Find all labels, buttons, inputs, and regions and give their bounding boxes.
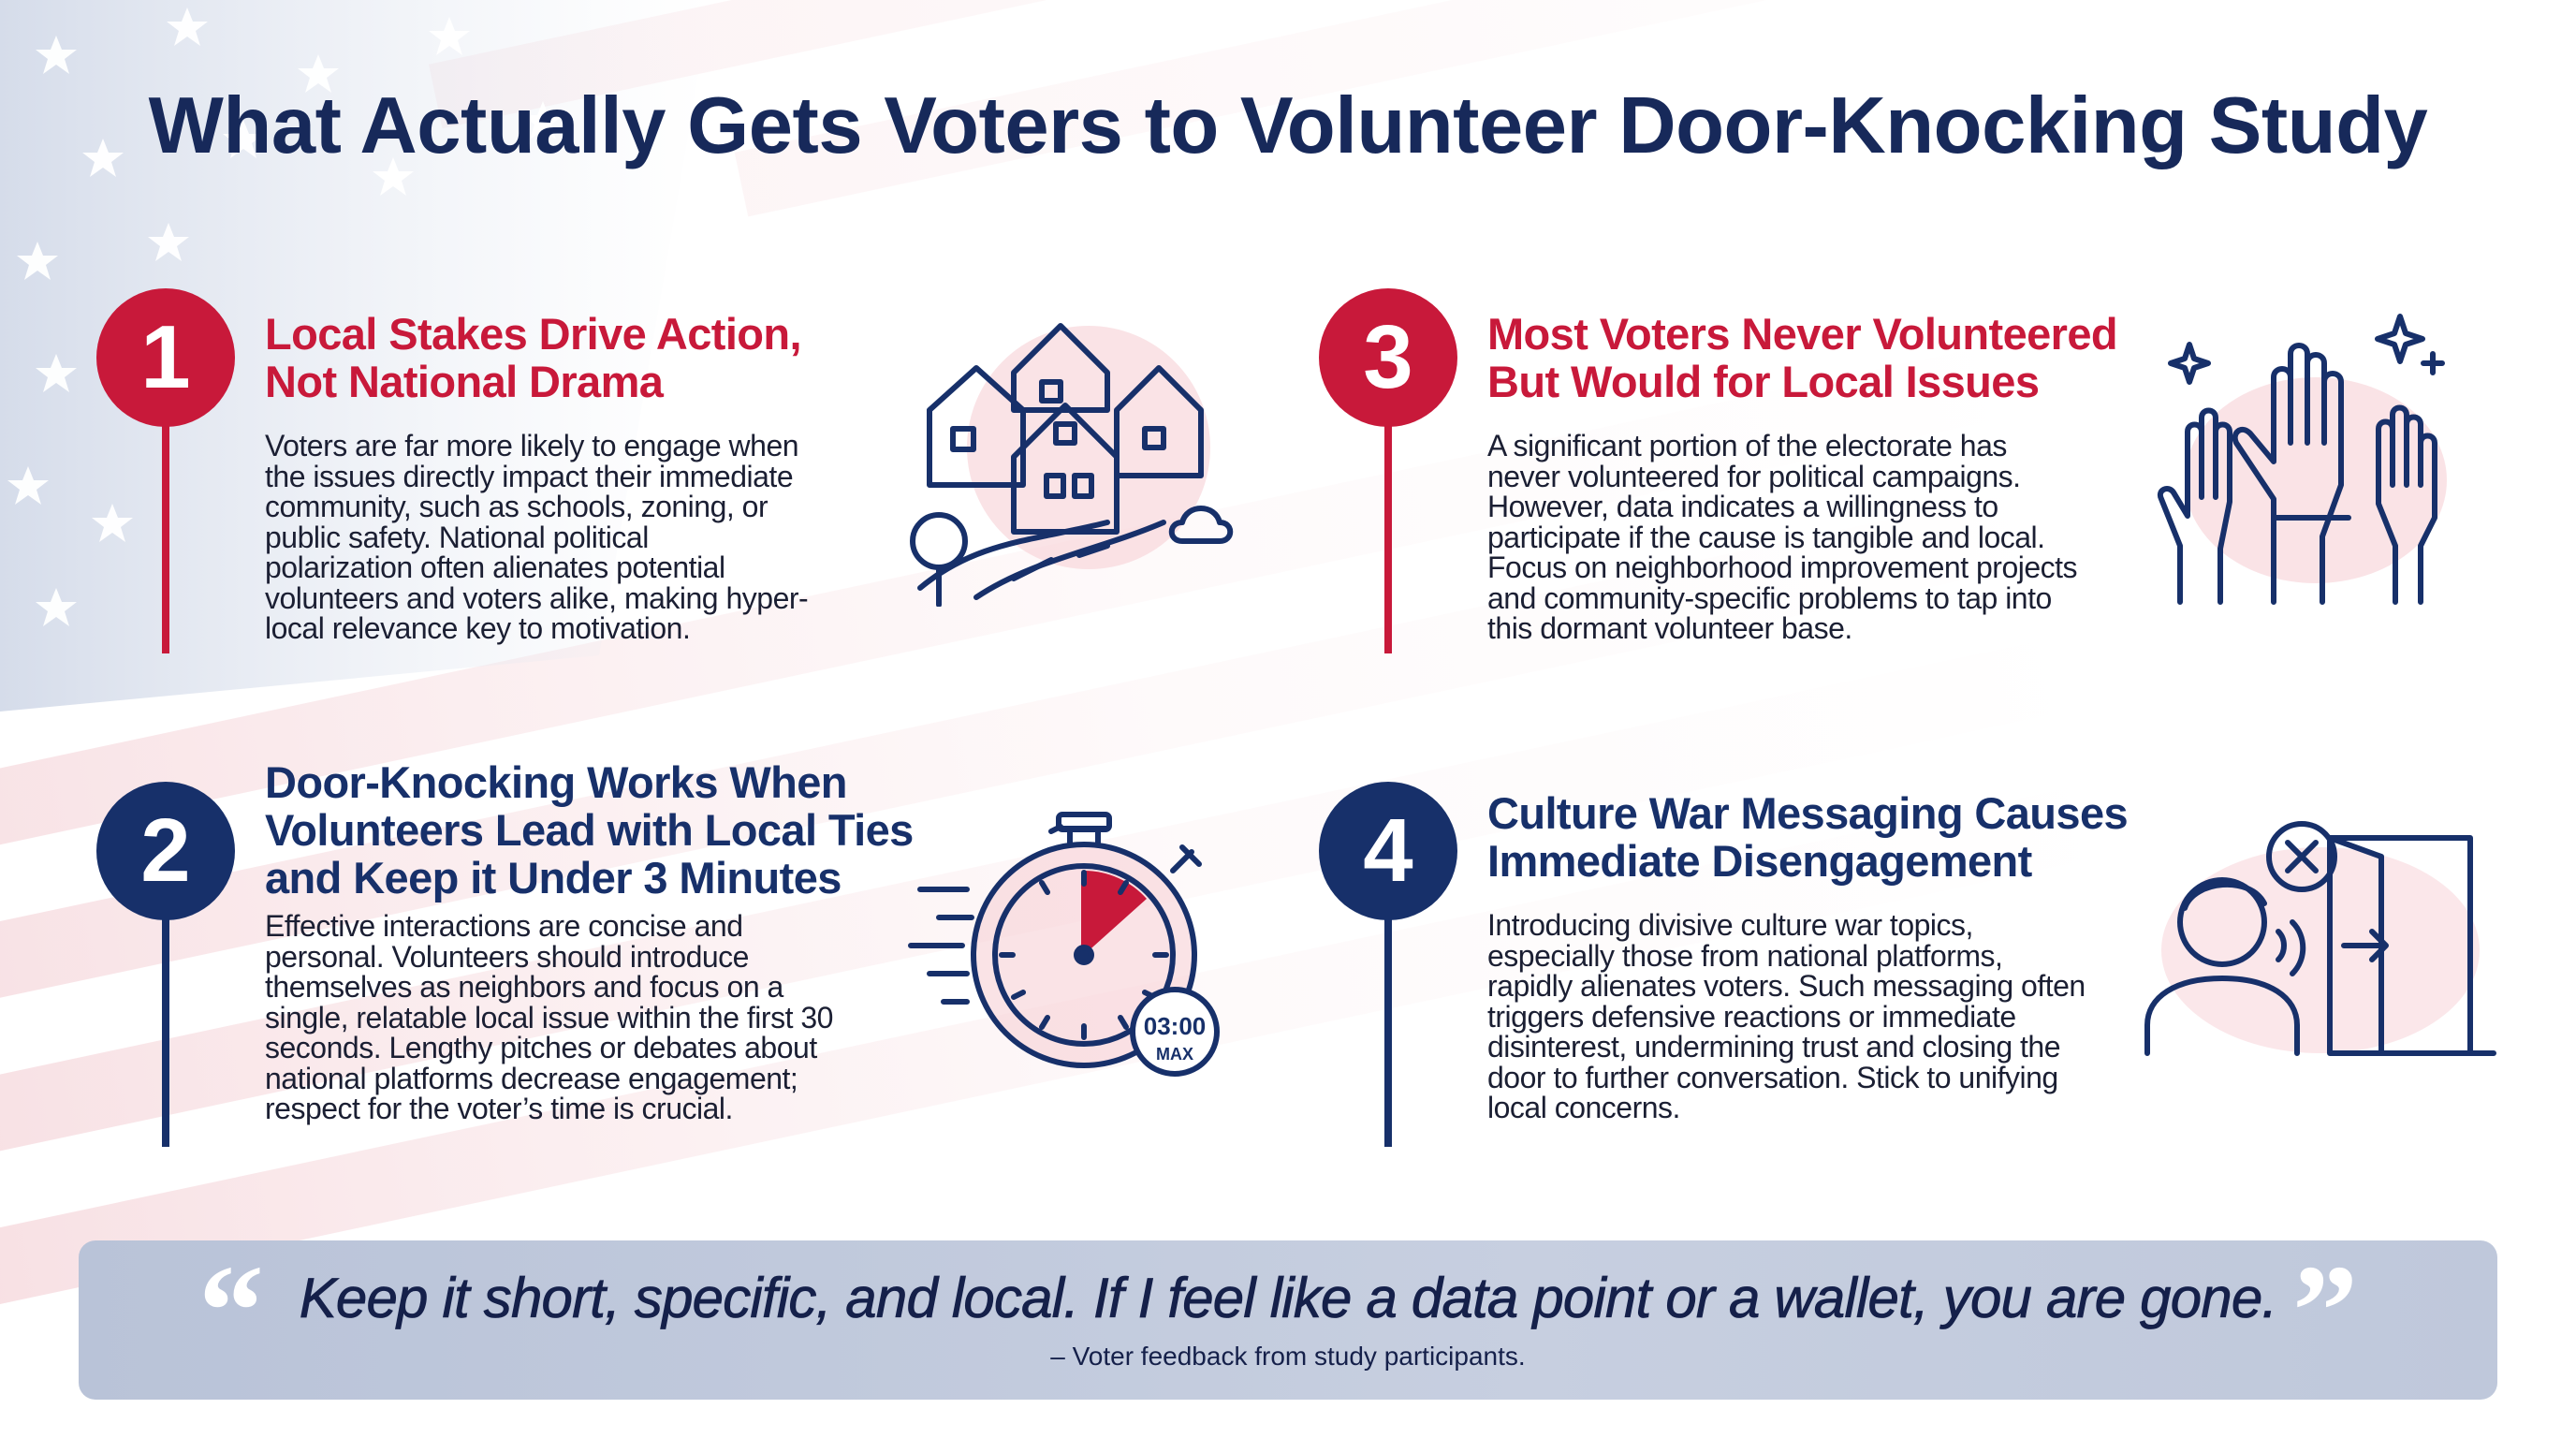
body 4: especially those from national platforms,	[1487, 938, 2002, 972]
body 2: Effective interactions are concise and	[265, 909, 742, 943]
number 4 marker	[1319, 782, 1457, 1147]
body 3: never volunteered for political campaigns.	[1487, 459, 2021, 492]
body 1: the issues directly impact their immediate	[265, 459, 793, 492]
number 4 marker: 4	[1363, 800, 1413, 901]
body 2	[265, 909, 833, 1125]
heading 3: Most Voters Never Volunteered	[1487, 309, 2117, 359]
body 2: national platforms decrease engagement;	[265, 1062, 798, 1095]
panel 4: culture war	[1319, 782, 2496, 1147]
icon: stopwatch: MAX	[1156, 1045, 1193, 1064]
body 2: single, relatable local issue within the first 30	[265, 1000, 833, 1034]
number 3 marker	[1319, 288, 1457, 653]
body 4: local concerns.	[1487, 1091, 1680, 1124]
title: What Actually Gets Voters to Volunteer Door-Knocking Study	[149, 81, 2427, 170]
heading 2: Door-Knocking Works When	[265, 757, 847, 807]
body 3: this dormant volunteer base.	[1487, 611, 1852, 645]
icon: stopwatch: 03:00	[1144, 1012, 1206, 1040]
number 3 marker: 3	[1363, 307, 1413, 407]
heading 2	[265, 757, 914, 902]
panel 3: never volunteered	[1319, 288, 2447, 653]
icon: houses	[910, 323, 1234, 607]
body 3	[1487, 429, 2077, 645]
heading 1: Not National Drama	[265, 357, 663, 406]
body 1: volunteers and voters alike, making hyper-	[265, 580, 808, 614]
body 3: Focus on neighborhood improvement projects	[1487, 550, 2077, 584]
body 1: community, such as schools, zoning, or	[265, 490, 768, 523]
body 3: and community-specific problems to tap into	[1487, 580, 2052, 614]
number 2 marker: 2	[140, 800, 191, 901]
body 4: Introducing divisive culture war topics,	[1487, 908, 1973, 942]
heading 4: Culture War Messaging Causes	[1487, 788, 2128, 838]
icon: raised hands	[2157, 314, 2447, 605]
body 4: rapidly alienates voters. Such messaging often	[1487, 969, 2086, 1003]
body 4	[1487, 908, 2086, 1124]
quote box: ”	[2292, 1240, 2358, 1384]
quote marks: “	[198, 1240, 264, 1384]
attribution: – Voter feedback from study participants.	[1050, 1342, 1526, 1371]
body 1	[265, 429, 808, 645]
body 4: triggers defensive reactions or immediate	[1487, 1000, 2016, 1034]
body 4: disinterest, undermining trust and closing the	[1487, 1030, 2060, 1064]
number 2 marker	[96, 782, 235, 1147]
panel 2: door-knocking	[96, 757, 1220, 1147]
number 1 marker	[96, 288, 2242, 653]
heading 4: Immediate Disengagement	[1487, 836, 2032, 886]
icon: stopwatch	[908, 812, 1220, 1077]
heading 2: Volunteers Lead with Local Ties	[265, 805, 914, 855]
body 4: door to further conversation. Stick to unifying	[1487, 1060, 2058, 1093]
body 2: respect for the voter’s time is crucial.	[265, 1092, 733, 1125]
body 2: seconds. Lengthy pitches or debates about	[265, 1031, 817, 1064]
body 1: Voters are far more likely to engage when	[265, 429, 798, 462]
heading 3: But Would for Local Issues	[1487, 357, 2039, 406]
body 3: A significant portion of the electorate has	[1487, 429, 2007, 462]
icon: person and door	[2144, 821, 2496, 1056]
panel 1: local stakes	[96, 288, 2352, 653]
body 1: local relevance key to motivation.	[265, 611, 690, 645]
heading 3	[1487, 309, 2117, 406]
body 2: personal. Volunteers should introduce	[265, 940, 749, 974]
body 1: public safety. National political	[265, 521, 649, 554]
heading 2: and Keep it Under 3 Minutes	[265, 853, 842, 902]
heading 1: Local Stakes Drive Action,	[265, 309, 801, 359]
number 1 marker: 1	[140, 307, 191, 407]
body 1: polarization often alienates potential	[265, 550, 725, 584]
heading 4	[1487, 788, 2128, 886]
body 3: participate if the cause is tangible and local.	[1487, 521, 2045, 554]
body 3: However, data indicates a willingness to	[1487, 490, 1998, 523]
quote box	[79, 1240, 2497, 1400]
heading 1	[265, 309, 801, 406]
body 2: themselves as neighbors and focus on a	[265, 970, 783, 1004]
quote text: Keep it short, specific, and local. If I feel like a data point or a wallet, you are gone.	[300, 1267, 2276, 1329]
